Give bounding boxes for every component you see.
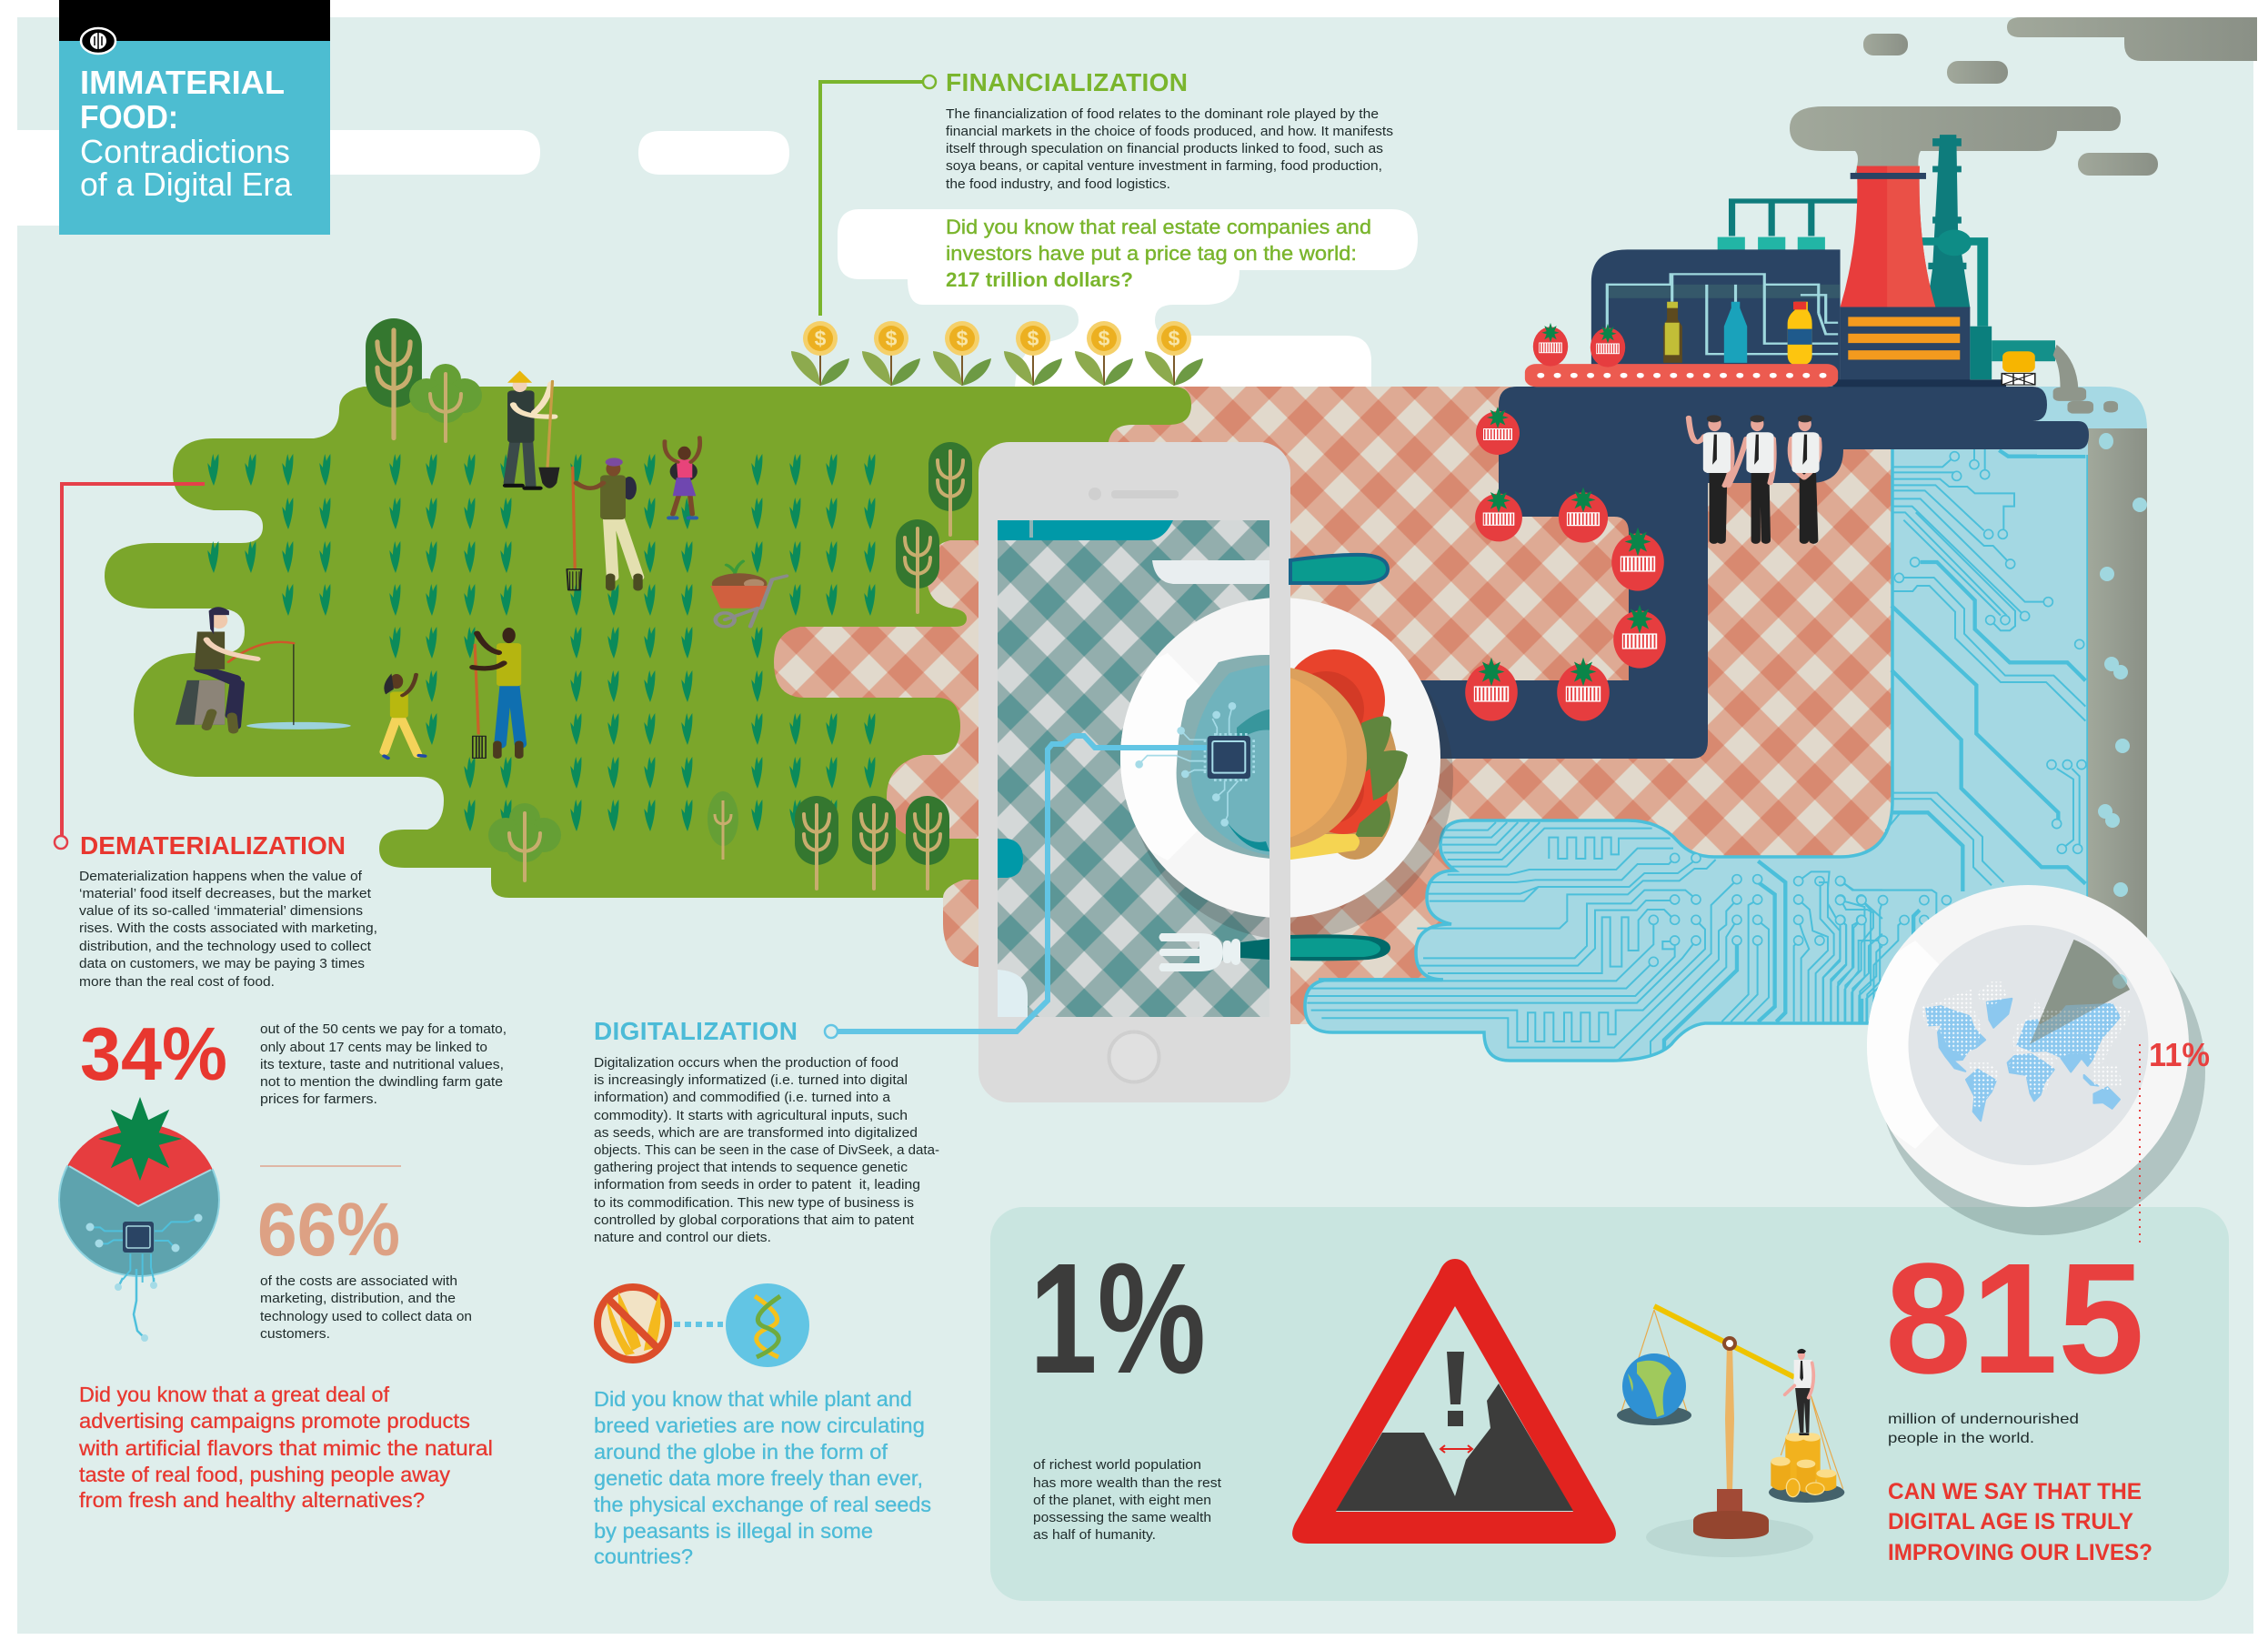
building	[1591, 249, 1841, 387]
text: financialization body: soya beans, or capital venture investment in farming, food production,	[946, 158, 1382, 174]
text: dematerialization body: distribution, and the technology used to collect	[79, 939, 372, 954]
fork handle	[1240, 934, 1390, 961]
callout: advertising question: from fresh and healthy alternatives?	[79, 1488, 425, 1512]
callout: real estate: investors have put a price tag on the world:	[946, 242, 1357, 265]
fisherman	[176, 607, 351, 729]
panel: right blue corner and grey pillar	[2037, 387, 2147, 1011]
text: dematerialization body: Dematerialization happens when the value of	[79, 869, 363, 884]
text: financialization body	[946, 106, 1393, 192]
callout: seeds question: Did you know that while plant and	[594, 1387, 912, 1411]
panel: navy conveyor path	[1410, 387, 2089, 759]
callout: seeds question	[594, 1387, 931, 1568]
text: digitalization body: Digitalization occurs when the production of food	[594, 1055, 898, 1071]
text: 34% explanation: out of the 50 cents we pay for a tomato,	[260, 1021, 507, 1037]
title text: FOOD:	[80, 98, 178, 136]
11 percent wedge	[2030, 940, 2130, 1044]
white cloud band behind title	[17, 130, 789, 226]
text: dematerialization body: data on customers, we may be paying 3 times	[79, 956, 365, 971]
callout: seeds question: by peasants is illegal in some	[594, 1519, 873, 1543]
phone camera and speaker	[1089, 488, 1179, 500]
text: 815 explanation: people in the world.	[1888, 1431, 2034, 1446]
light pipes	[1607, 274, 1838, 354]
title text: of a Digital Era	[80, 166, 293, 203]
phone body	[978, 442, 1290, 1102]
callout: advertising question: taste of real food, pushing people away	[79, 1463, 450, 1486]
factory	[1525, 135, 2118, 414]
callout: advertising question: with artificial flavors that mimic the natural	[78, 1436, 493, 1460]
text: 815 explanation	[1888, 1412, 2079, 1446]
callout: seeds question: breed varieties are now circulating	[594, 1414, 925, 1437]
text: 66% explanation: marketing, distribution, and the	[260, 1291, 456, 1306]
text: 66% explanation: technology used to collect data on	[260, 1309, 472, 1324]
callout: seeds question: countries?	[594, 1544, 693, 1568]
11% dotted leader	[2139, 1044, 2141, 1248]
text: dematerialization body: more than the real cost of food.	[79, 974, 275, 990]
text: digitalization body: gathering project that intends to sequence genetic	[594, 1160, 908, 1175]
cooling tower	[1841, 166, 1935, 307]
text: 34% explanation: only about 17 cents may be linked to	[260, 1040, 487, 1055]
plate centre	[1908, 925, 2148, 1165]
dematerialization node	[55, 836, 67, 849]
title text: Contradictions	[80, 133, 290, 170]
three businessmen	[1689, 415, 1820, 540]
text: financialization body: the food industry, and food logistics.	[946, 176, 1170, 192]
coin flowers	[791, 321, 1203, 386]
child in yellow	[384, 673, 425, 758]
scale beam	[1654, 1306, 1794, 1377]
text: dematerialization body: rises. With the costs associated with marketing,	[79, 921, 377, 936]
teal screen header	[998, 520, 1173, 540]
icon: no corn seeds to DNA	[597, 1283, 809, 1367]
text: financialization body: The financialization of food relates to the dominant role played by the	[946, 106, 1379, 122]
text: digitalization body: controlled by global corporations that aim to patent	[594, 1212, 915, 1228]
stat: 11%: 11%	[2149, 1036, 2210, 1073]
callout: real estate: Did you know that real estate companies and	[946, 216, 1371, 238]
rice sprouts	[207, 454, 875, 831]
girl with raised arms	[665, 438, 700, 518]
tablecloth	[764, 387, 1894, 1024]
text: digitalization body: information from seeds in order to patent it, leading	[594, 1177, 920, 1192]
plate shadow	[1878, 908, 2205, 1235]
text: 815 explanation: million of undernourished	[1888, 1412, 2079, 1427]
circuit traces behind world plate	[1819, 876, 1951, 1026]
text: 34% explanation: prices for farmers.	[260, 1092, 377, 1107]
text: digitalization body: objects. This can be seen in the case of DivSeek, a data-	[594, 1142, 939, 1158]
farm people	[176, 371, 787, 758]
text: digitalization body: to its commodification. This new type of business is	[594, 1195, 914, 1211]
phone with plate illustration	[825, 442, 1453, 1102]
text: digitalization body	[594, 1055, 939, 1245]
closing question: DIGITAL AGE IS TRULY	[1888, 1509, 2133, 1534]
heading: financialization: FINANCIALIZATION	[946, 68, 1188, 96]
teal side tab	[998, 839, 1023, 878]
plate highlight	[1120, 660, 1154, 851]
text: digitalization body: information) and commodified (i.e. turned into a	[594, 1090, 891, 1105]
pillar droplets	[2098, 433, 2147, 897]
smoke clouds	[1790, 17, 2257, 176]
text: 34% explanation: not to mention the dwindling farm gate	[260, 1074, 503, 1090]
text: 66% explanation	[260, 1273, 472, 1342]
callout: advertising question: Did you know that a great deal of	[79, 1383, 390, 1406]
plate	[1120, 598, 1440, 918]
connector wire to digitalization	[838, 736, 1207, 1031]
woman with fork	[567, 458, 638, 590]
knife blade	[1152, 560, 1269, 584]
pipes	[1732, 201, 1858, 236]
closing question	[1888, 1479, 2153, 1565]
white callout cloud	[838, 209, 1418, 387]
text: 1% explanation: of richest world population	[1033, 1457, 1201, 1473]
callout: advertising question: advertising campaigns promote products	[79, 1409, 470, 1433]
icon: circuit tomato	[59, 1097, 219, 1342]
text: 66% explanation: customers.	[260, 1326, 330, 1342]
text: dematerialization body	[79, 869, 377, 990]
world map	[1921, 981, 2131, 1121]
text: financialization body: financial markets in the choice of foods produced, and how. It manifests	[946, 124, 1393, 139]
panel: circuit-board food shape	[1305, 446, 2088, 1061]
callout: seeds question: genetic data more freely than ever,	[594, 1466, 923, 1490]
icon: scale weighing world against billionaire	[1617, 1306, 1844, 1557]
text: 34% explanation	[260, 1021, 507, 1107]
burger	[1290, 649, 1408, 860]
text: dematerialization body: ‘material’ food itself decreases, but the market	[79, 886, 372, 901]
barcoded tomatoes	[1465, 323, 1666, 721]
fork	[1159, 933, 1240, 971]
phone screen tablecloth	[998, 520, 1269, 1017]
microchip on cabbage	[1135, 702, 1254, 827]
circuit traces lower-left	[1306, 822, 1882, 1060]
heading: dematerialization: DEMATERIALIZATION	[80, 831, 346, 860]
circuit traces right column	[1885, 448, 2086, 891]
text: dematerialization body: value of its so-called ‘immaterial’ dimensions	[79, 903, 363, 919]
green field	[105, 387, 1191, 898]
wheelbarrow	[710, 561, 787, 627]
red conveyor belt	[1525, 364, 1838, 387]
closing question: IMPROVING OUR LIVES?	[1888, 1540, 2153, 1565]
plate rim	[1867, 885, 2189, 1207]
callout: advertising question	[78, 1383, 493, 1512]
text: 1% explanation: as half of humanity.	[1033, 1527, 1156, 1543]
base with orange bars	[1841, 307, 1970, 380]
text: digitalization body: commodity). It starts with agricultural inputs, such	[594, 1108, 908, 1123]
text: digitalization body: is increasingly informatized (i.e. turned into digital	[594, 1072, 908, 1088]
text: 66% explanation: of the costs are associated with	[260, 1273, 457, 1289]
connector node	[825, 1025, 838, 1038]
text: digitalization body: as seeds, which are are transformed into digitalized	[594, 1125, 918, 1141]
stat: 815: 815	[1885, 1230, 2144, 1406]
icon: warning triangle with wealth gap	[1292, 1259, 1616, 1544]
closing question: CAN WE SAY THAT THE	[1888, 1479, 2142, 1504]
eye logo	[81, 28, 115, 54]
outlet pipe	[1970, 327, 1992, 379]
light corner on screen	[998, 970, 1028, 1017]
text: digitalization body: nature and control our diets.	[594, 1230, 771, 1245]
callout: real estate	[946, 216, 1371, 291]
financialization connector	[820, 82, 922, 316]
billionaire on coin stacks	[1769, 1349, 1844, 1503]
text: financialization body: itself through speculation on financial products linked to food, such as	[946, 141, 1383, 156]
hat farmer with spade	[506, 371, 559, 488]
text: 34% explanation: its texture, taste and nutritional values,	[260, 1057, 504, 1072]
callout: seeds question: around the globe in the form of	[594, 1440, 888, 1464]
stat: 1%: 1%	[1029, 1230, 1206, 1406]
home button	[1109, 1031, 1159, 1082]
title card	[59, 0, 330, 235]
stat: 34%: 34%	[80, 1011, 227, 1096]
stat: 66%: 66%	[257, 1187, 400, 1272]
heading: digitalization: DIGITALIZATION	[594, 1017, 798, 1045]
callout: real estate: 217 trillion dollars?	[946, 268, 1133, 291]
cabbage on plate	[1177, 655, 1269, 859]
man with pitchfork	[473, 628, 521, 758]
panel: bottom statistics	[990, 1207, 2229, 1601]
callout: seeds question: the physical exchange of real seeds	[594, 1493, 931, 1516]
knife handle	[1290, 555, 1388, 583]
title text: IMMATERIAL	[80, 64, 285, 101]
title text	[80, 64, 293, 203]
trees	[366, 318, 972, 889]
phone frame strip over plate	[1269, 582, 1290, 946]
text: 1% explanation	[1033, 1457, 1222, 1543]
financialization node	[923, 75, 936, 88]
wedge tint over map	[2030, 940, 2130, 1044]
text: 1% explanation: possessing the same wealth	[1033, 1510, 1211, 1525]
text: 1% explanation: of the planet, with eight men	[1033, 1493, 1211, 1508]
plate shadow	[1129, 616, 1453, 940]
bottles	[1663, 302, 1682, 363]
dematerialization connector	[62, 484, 205, 836]
world plate with hunger map	[1837, 885, 2205, 1235]
chimney	[1927, 135, 1970, 308]
text: 1% explanation: has more wealth than the rest	[1033, 1475, 1222, 1491]
